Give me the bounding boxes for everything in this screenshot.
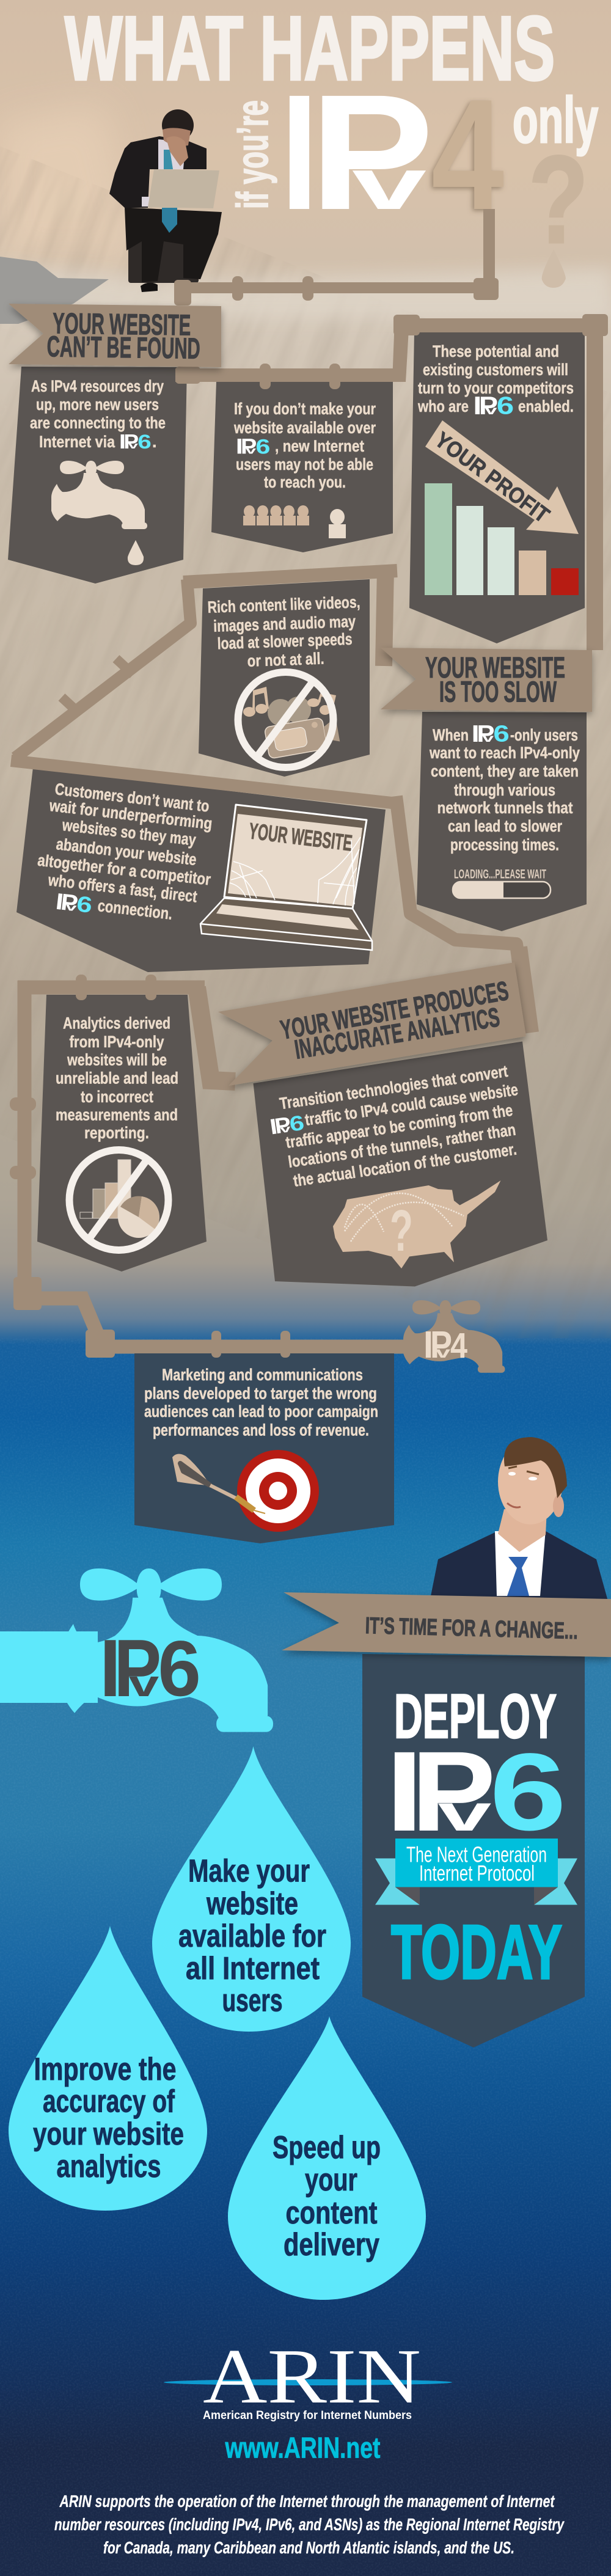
panel: transition technologies, inaccurate location — [253, 1041, 547, 1287]
icon: US map with tunnels and question mark: ? — [390, 1198, 413, 1264]
pipe flanges over panel top — [76, 975, 156, 1000]
photo: worried businessman with laptop on a suitcase — [109, 109, 222, 292]
panel: unreliable analytics — [37, 975, 207, 1272]
text block: want to reach IPv4-only — [429, 744, 580, 762]
icon: IPv6 logo: I — [119, 431, 126, 453]
icon: cracked laptop showing your website: YOUR WEBSITE — [247, 818, 354, 856]
icon: IPv6 logo: v — [483, 732, 494, 744]
icon: IPv6 logo: I — [236, 434, 243, 459]
icon: IPv6 logo: P — [273, 1112, 293, 1138]
panel: website too slow, network tunnels — [417, 712, 587, 931]
icon: cracked laptop showing your website — [200, 805, 372, 950]
text block — [30, 377, 166, 451]
text block: website available over — [233, 419, 376, 437]
IPv logo word — [280, 60, 505, 244]
IPv4 label on tap: P — [430, 1324, 452, 1366]
text block: reporting. — [84, 1124, 149, 1142]
icon: IPv6 logo: v — [246, 445, 256, 456]
icon: large IPv6 logo: v — [437, 1784, 492, 1842]
IPv logo word: P — [310, 60, 434, 244]
text block: , new Internet — [275, 437, 364, 455]
icon: IPv6 logo: v — [280, 1123, 291, 1135]
icon: IPv6 logo: I — [54, 888, 65, 915]
panel: rich content loads slowly — [199, 579, 370, 777]
bar chart: falling profit — [425, 483, 579, 595]
text block: content, they are taken — [431, 762, 579, 780]
text block — [37, 780, 213, 923]
text block: users may not be able — [236, 455, 373, 474]
drop: make your website available: all Internet — [186, 1951, 320, 1986]
text block — [207, 593, 360, 670]
text block: websites will be — [67, 1051, 167, 1069]
text block — [279, 1062, 519, 1190]
IPv4 label on tap: v — [436, 1343, 451, 1361]
icon: IPv4 tap running dry — [403, 1300, 505, 1373]
drop: speed up content delivery: Speed up — [273, 2130, 381, 2165]
pipe: analytics panel frame and down to IPv4 tap — [10, 981, 415, 1358]
text block: -only users — [510, 726, 578, 744]
banner: your website produces inaccurate analytics — [218, 962, 526, 1086]
text block: These potential and — [433, 342, 559, 360]
icon: no video, images or audio — [238, 672, 341, 767]
panel: customers abandon website — [16, 767, 386, 972]
IPv6 label on tap — [100, 1623, 201, 1714]
text block: If you don’t make your — [234, 400, 376, 418]
icon: large IPv6 logo — [386, 1728, 566, 1855]
icon: IPv6 logo — [472, 721, 510, 747]
text block: are connecting to the — [30, 414, 166, 432]
icon: IPv6 logo: 6 — [137, 431, 152, 453]
text block: images and audio may — [213, 612, 356, 635]
text block: load at slower speeds — [217, 630, 353, 653]
progress bar — [452, 882, 551, 898]
vertical text: if you're: if you’re — [229, 100, 277, 209]
drop: make your website available: available for — [178, 1919, 326, 1954]
IPv4 label on tap — [423, 1324, 467, 1366]
text block: Rich content like videos, — [207, 593, 360, 617]
banner: your website can't be found: CAN’T BE FOUND — [46, 331, 200, 365]
arrow: your profit falling: YOUR PROFIT — [430, 426, 554, 527]
banner: your website is too slow — [381, 648, 592, 712]
ribbon: the next generation internet protocol: The Next Generation — [406, 1842, 547, 1867]
icon: dripping faucet — [51, 461, 147, 565]
icon: crowd of users and one person — [243, 505, 346, 538]
text block: locations of the tunnels, rather than — [287, 1121, 517, 1171]
text block: Analytics derived — [63, 1014, 170, 1033]
text block: from IPv4-only — [70, 1033, 164, 1051]
icon: IPv6 logo: P — [477, 721, 495, 747]
text block: to incorrect — [81, 1088, 153, 1106]
IPv6 label on tap: P — [114, 1623, 161, 1714]
text block — [429, 726, 580, 854]
text block: wait for underperforming — [48, 796, 213, 833]
icon: IPv6 logo: 6 — [255, 435, 270, 458]
IPv4 label on tap: I — [423, 1324, 433, 1366]
drop: improve analytics accuracy: analytics — [56, 2149, 161, 2184]
banner: your website can't be found: YOUR WEBSITE — [53, 307, 191, 342]
icon: large IPv6 logo: 6 — [489, 1731, 566, 1854]
icon: IPv6 logo: 6 — [75, 891, 93, 918]
icon: IPv6 logo: P — [241, 434, 257, 459]
icon: IPv6 logo: 6 — [288, 1111, 306, 1136]
logo: ARIN — [164, 2333, 452, 2422]
text block: turn to your competitors — [418, 379, 574, 397]
icon: IPv6 logo: I — [268, 1114, 279, 1140]
text block: up, more new users — [36, 395, 159, 414]
text block: to reach you. — [264, 473, 346, 491]
icon: IPv6 logo: 6 — [497, 392, 514, 420]
text block: websites so they may — [61, 816, 197, 849]
text block: who are — [417, 397, 469, 415]
pipe: winding from slow section down to analytics — [11, 568, 532, 1033]
drop: make your website available — [152, 1746, 351, 2032]
icon: IPv6 logo: I — [473, 391, 481, 420]
text block: network tunnels that — [437, 799, 573, 817]
IPv6 label on tap: I — [100, 1623, 121, 1714]
IPv6 label on tap: v — [129, 1664, 159, 1704]
icon: IPv6 logo — [473, 391, 514, 420]
text block: altogether for a competitor — [37, 851, 212, 889]
drop: speed up content delivery — [228, 2016, 426, 2300]
text block — [144, 1366, 378, 1440]
drop: speed up content delivery: content — [286, 2195, 378, 2231]
text block: Transition technologies that convert — [279, 1062, 509, 1113]
loading caption: LOADING...PLEASE WAIT — [454, 868, 546, 881]
text block: abandon your website — [55, 835, 197, 869]
text block: audiences can lead to poor campaign — [144, 1402, 378, 1421]
drop: improve analytics accuracy: your website — [33, 2117, 184, 2152]
question mark with drop: ? — [529, 130, 588, 269]
panel: new users may not reach you — [211, 382, 393, 552]
icon: IPv6 logo: P — [479, 391, 498, 420]
drop: make your website available: users — [222, 1983, 282, 2019]
logo: ARIN: ARIN — [203, 2333, 421, 2420]
panel: marketing plans target wrong audiences — [134, 1331, 394, 1543]
IPv logo word: 4 — [431, 66, 505, 243]
ribbon: the next generation internet protocol — [375, 1839, 577, 1905]
text block: performances and loss of revenue. — [153, 1421, 369, 1440]
icon: large IPv6 logo: P — [411, 1728, 496, 1855]
text block: who offers a fast, direct — [47, 871, 198, 906]
text block: . — [152, 433, 157, 451]
panel: website can't be found, IPv4 resources — [8, 367, 187, 584]
icon: IPv6 logo — [236, 434, 270, 458]
logo: if you're IPv4 only? — [229, 60, 598, 288]
icon: IPv6 logo: P — [59, 889, 79, 917]
icon: no charts — [70, 1150, 169, 1250]
text block — [56, 1014, 178, 1142]
drop: improve analytics accuracy — [9, 1926, 207, 2211]
IPv4 label on tap: 4 — [450, 1326, 467, 1366]
icon: IPv6 logo: I — [472, 721, 480, 747]
drop: make your website available: website — [206, 1886, 298, 1922]
icon: IPv6 logo: v — [65, 901, 78, 914]
IPv6 label on tap: 6 — [158, 1624, 201, 1713]
text block: traffic to IPv4 could cause website — [304, 1080, 519, 1129]
drop: make your website available: Make your — [188, 1854, 310, 1889]
text block: through various — [454, 781, 555, 799]
panel: deploy IPv6 today — [362, 1654, 585, 2047]
icon: IPv6 logo — [54, 888, 93, 918]
text block: enabled. — [518, 397, 574, 415]
banner: it's time for a change — [282, 1592, 611, 1657]
photo: hopeful businessman looking up — [431, 1437, 608, 1601]
text block: plans developed to target the wrong — [144, 1385, 377, 1403]
pipe: from logo to first section — [174, 209, 499, 306]
pipe flanges over panel top — [211, 1331, 290, 1358]
footer text — [54, 2492, 565, 2557]
icon: IPv6 logo: 6 — [493, 722, 510, 747]
IPv logo word: v — [352, 144, 426, 225]
drop: speed up content delivery: delivery — [284, 2227, 379, 2263]
text block: Internet via — [39, 433, 115, 451]
icon: large IPv6 logo: I — [386, 1728, 423, 1855]
icon: IPv6 logo: v — [485, 404, 497, 417]
text block: connection. — [97, 896, 174, 923]
icon: dart and target — [172, 1450, 319, 1532]
text block: As IPv4 resources dry — [31, 377, 164, 395]
pipe: connecting first section panels — [175, 314, 608, 650]
text block: traffic appear to be coming from the — [285, 1101, 514, 1152]
icon: IPv6 logo — [119, 431, 152, 453]
text block: the actual location of the customer. — [292, 1140, 518, 1190]
drop: improve analytics accuracy: accuracy of — [43, 2084, 175, 2119]
text block: processing times. — [450, 836, 559, 854]
icon: large IPv6 tap — [0, 1568, 273, 1732]
icon: IPv6 logo: v — [128, 441, 139, 451]
text block: measurements and — [56, 1106, 178, 1124]
banner: your website can't be found — [9, 304, 221, 367]
ribbon: the next generation internet protocol: Internet Protocol — [419, 1861, 535, 1886]
icon: US map with tunnels and question mark — [333, 1180, 501, 1268]
text block: Marketing and communications — [162, 1366, 363, 1384]
drop: improve analytics accuracy: Improve the — [34, 2052, 176, 2087]
website link: www.ARIN.net — [225, 2432, 381, 2465]
text block — [417, 342, 574, 415]
text block: Customers don’t want to — [54, 780, 210, 816]
IPv logo word: I — [280, 60, 318, 244]
text block: unreliable and lead — [56, 1069, 178, 1088]
text block: When — [433, 726, 469, 744]
text block — [233, 400, 376, 491]
panel: customers turn to competitors — [409, 332, 585, 643]
text block: or not at all. — [247, 649, 324, 670]
icon: IPv6 logo: P — [123, 431, 139, 453]
text block: existing customers will — [423, 360, 568, 379]
logo: ARIN: American Registry for Internet Numbers — [203, 2409, 412, 2422]
drop: speed up content delivery: your — [305, 2162, 357, 2198]
text block: can lead to slower — [448, 817, 562, 835]
icon: IPv6 logo — [268, 1110, 306, 1140]
